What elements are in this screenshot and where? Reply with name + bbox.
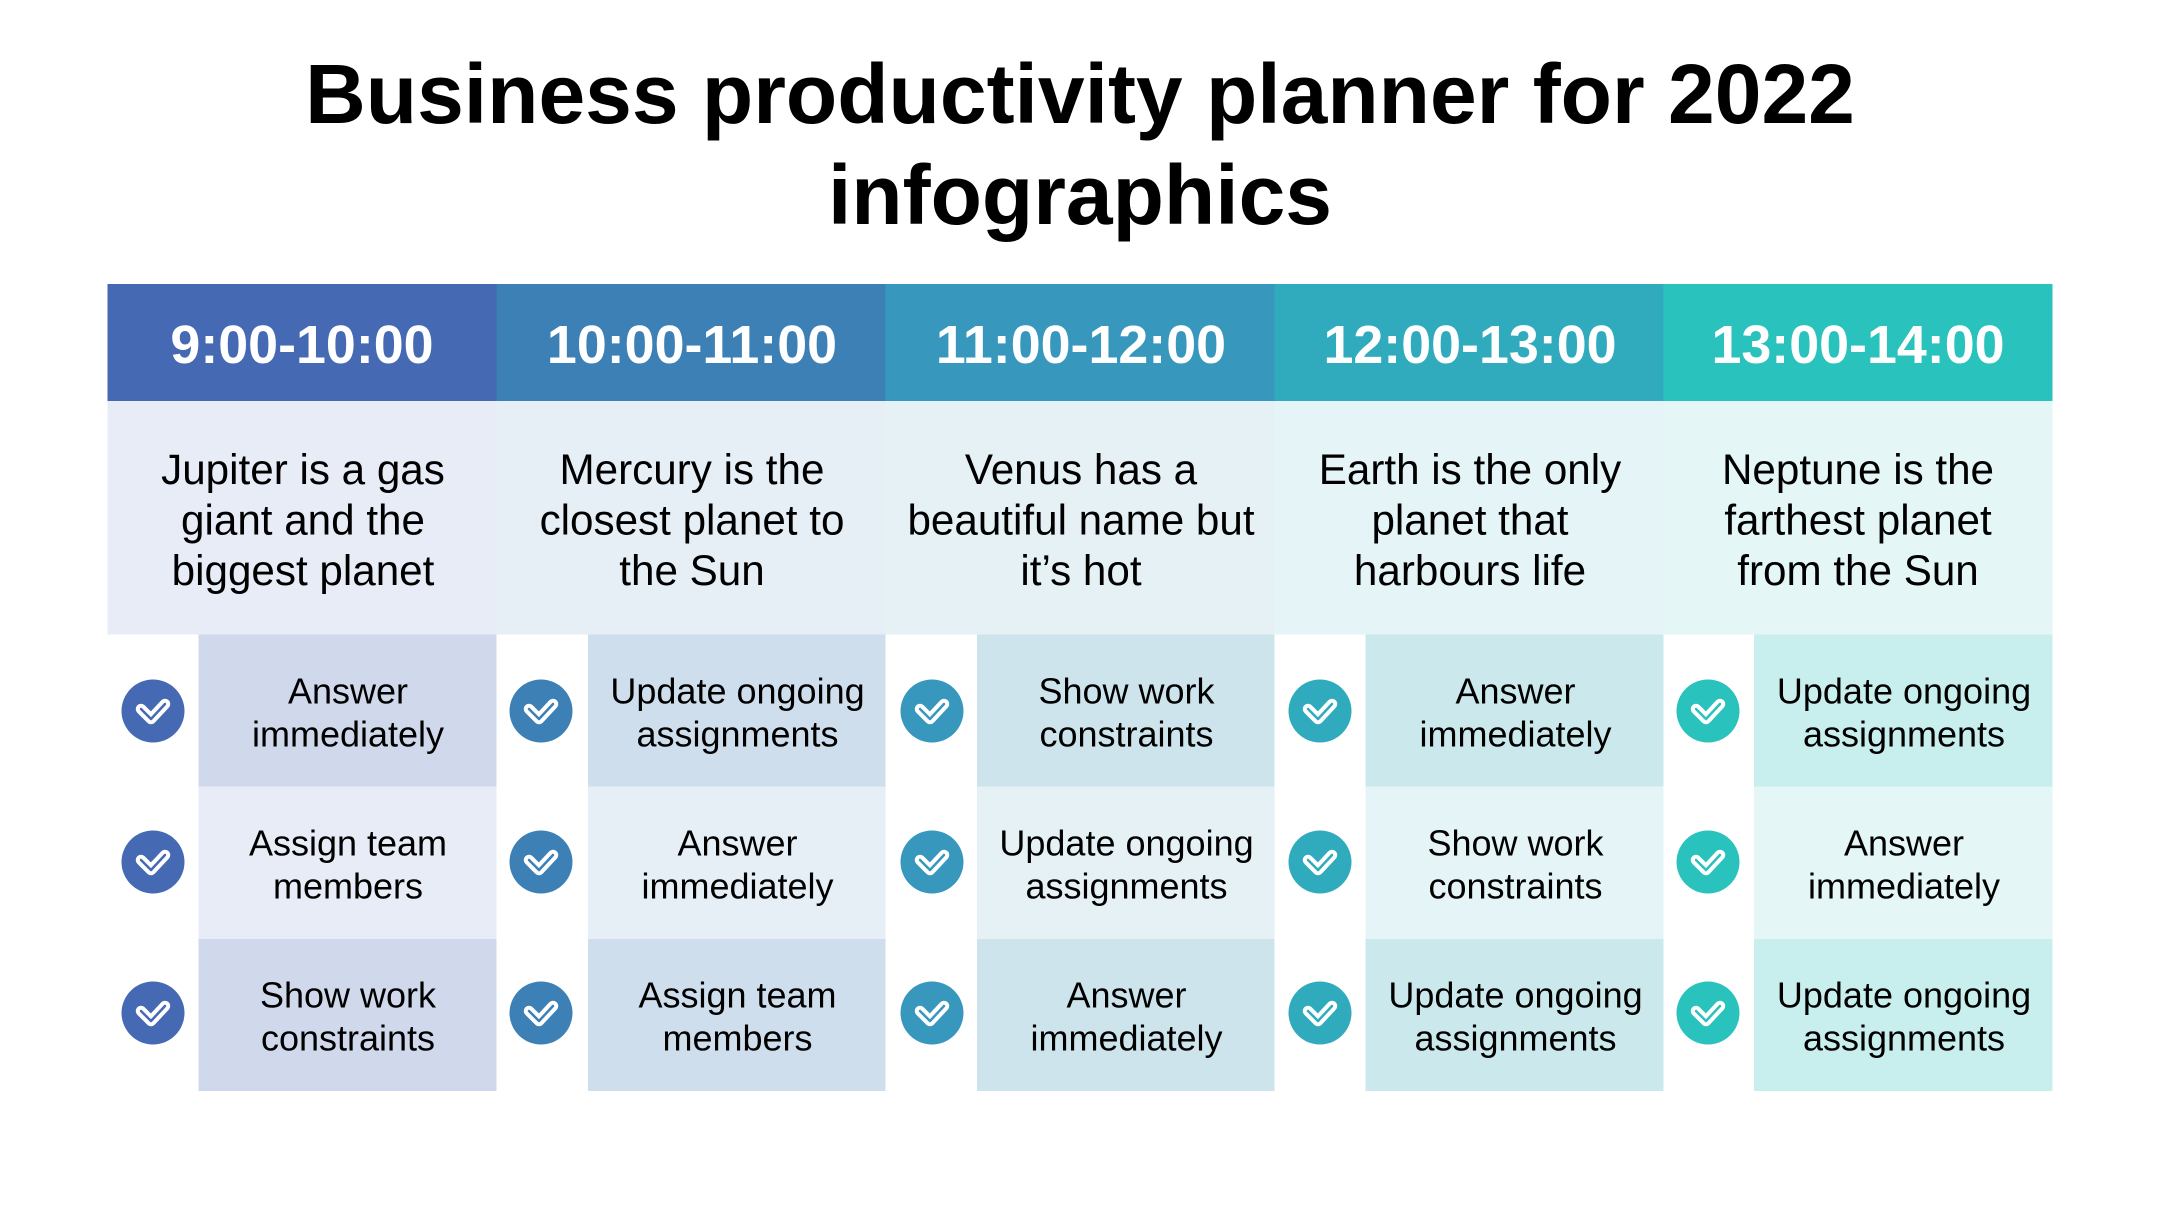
icon: check 3 xyxy=(510,982,572,1044)
task 1: Show work xyxy=(1038,670,1216,712)
task 1: Update ongoing xyxy=(610,670,865,712)
task 3 xyxy=(588,939,886,1091)
description: Earth: Earth is the only xyxy=(1319,446,1622,493)
icon: check 1 xyxy=(900,680,964,742)
icon: check 2 xyxy=(1288,830,1352,894)
icon: check 2 xyxy=(510,830,572,894)
task 1 xyxy=(1754,634,2052,786)
task 2: immediately xyxy=(641,866,834,906)
icon: check 2 xyxy=(1676,830,1740,894)
task 2: constraints xyxy=(1428,866,1603,906)
task 1 xyxy=(198,634,496,786)
description: Earth: planet that xyxy=(1371,496,1569,544)
title xyxy=(305,47,1855,242)
icon: check 2 xyxy=(122,830,184,894)
icon: check 3 xyxy=(122,982,184,1044)
task 2: Show work xyxy=(1427,822,1605,864)
description: Earth: harbours life xyxy=(1354,547,1586,594)
task 3: members xyxy=(662,1018,813,1058)
task 1 xyxy=(588,634,886,786)
task 2: members xyxy=(273,866,423,906)
task 1: Answer xyxy=(1455,670,1576,712)
task 3: Answer xyxy=(1066,974,1187,1016)
title: Business productivity planner for 2022 xyxy=(305,47,1855,141)
header: 11:00-12:00 xyxy=(886,284,1274,401)
task 2: Update ongoing xyxy=(999,822,1254,864)
description: Venus xyxy=(886,401,1274,634)
task 3: constraints xyxy=(261,1018,435,1058)
header: 11:00-12:00: 11:00-12:00 xyxy=(936,315,1226,375)
task 3: Update ongoing xyxy=(1777,974,2031,1016)
icon: check 2 xyxy=(900,830,964,894)
task 3: assignments xyxy=(1803,1018,2005,1058)
task 3: assignments xyxy=(1414,1018,1617,1058)
task 3: Update ongoing xyxy=(1388,974,1643,1016)
column 2: 10:00-11:00 xyxy=(496,284,886,1091)
icon: check 3 xyxy=(1288,982,1352,1044)
description: Jupiter: giant and the xyxy=(181,496,425,544)
task 1 xyxy=(977,634,1274,786)
description: Neptune: Neptune is the xyxy=(1722,446,1994,493)
description: Mercury: the Sun xyxy=(619,547,765,594)
header: 9:00-10:00 xyxy=(108,284,496,401)
description: Neptune: farthest planet xyxy=(1724,496,1992,544)
task 3 xyxy=(1366,939,1664,1091)
icon: check 3 xyxy=(900,982,964,1044)
icon: check 1 xyxy=(122,680,184,742)
task 2: assignments xyxy=(1025,866,1228,906)
description: Mercury: Mercury is the xyxy=(560,446,824,493)
column 1: 9:00-10:00 xyxy=(108,284,496,1091)
task 2: Answer xyxy=(1844,822,1964,864)
header: 9:00-10:00: 9:00-10:00 xyxy=(170,315,434,375)
task 3: Show work xyxy=(260,974,437,1016)
task 3 xyxy=(198,939,496,1091)
icon: check 1 xyxy=(1288,680,1352,742)
task 1: immediately xyxy=(252,714,444,754)
task 1: Answer xyxy=(288,670,408,712)
task 1: immediately xyxy=(1419,714,1612,754)
icon: check 3 xyxy=(1676,982,1740,1044)
description: Jupiter xyxy=(108,401,496,634)
header: 12:00-13:00: 12:00-13:00 xyxy=(1323,315,1617,375)
header: 10:00-11:00: 10:00-11:00 xyxy=(547,315,837,375)
description: Mercury xyxy=(496,401,886,634)
column 5: 13:00-14:00 xyxy=(1664,284,2052,1091)
task 2 xyxy=(1366,786,1664,939)
column 3: 11:00-12:00 xyxy=(886,284,1274,1091)
task 2: Assign team xyxy=(249,822,447,864)
title: infographics xyxy=(828,148,1332,242)
description: Mercury: closest planet to xyxy=(540,496,844,544)
task 2 xyxy=(588,786,886,939)
header: 13:00-14:00 xyxy=(1664,284,2052,401)
task 2 xyxy=(1754,786,2052,939)
description: Venus: beautiful name but xyxy=(907,496,1255,544)
description: Neptune xyxy=(1664,401,2052,634)
task 1: assignments xyxy=(1803,714,2005,754)
task 3 xyxy=(1754,939,2052,1091)
task 1: constraints xyxy=(1039,714,1214,754)
description: Jupiter: Jupiter is a gas xyxy=(161,446,445,493)
task 3: immediately xyxy=(1030,1018,1223,1058)
header: 13:00-14:00: 13:00-14:00 xyxy=(1711,315,2005,375)
task 2 xyxy=(198,786,496,939)
task 2 xyxy=(977,786,1274,939)
task 1: assignments xyxy=(636,714,839,754)
column 4: 12:00-13:00 xyxy=(1274,284,1664,1091)
description: Jupiter: biggest planet xyxy=(172,547,435,594)
header: 12:00-13:00 xyxy=(1274,284,1664,401)
task 3 xyxy=(977,939,1274,1091)
task 1: Update ongoing xyxy=(1777,670,2031,712)
task 2: immediately xyxy=(1808,866,2000,906)
task 3: Assign team xyxy=(638,974,837,1016)
icon: check 1 xyxy=(1676,680,1740,742)
header: 10:00-11:00 xyxy=(496,284,886,401)
description: Venus: it’s hot xyxy=(1020,547,1142,594)
icon: check 1 xyxy=(510,680,572,742)
description: Neptune: from the Sun xyxy=(1737,547,1979,594)
description: Venus: Venus has a xyxy=(965,446,1198,493)
task 2: Answer xyxy=(677,822,798,864)
description: Earth xyxy=(1274,401,1664,634)
task 1 xyxy=(1366,634,1664,786)
